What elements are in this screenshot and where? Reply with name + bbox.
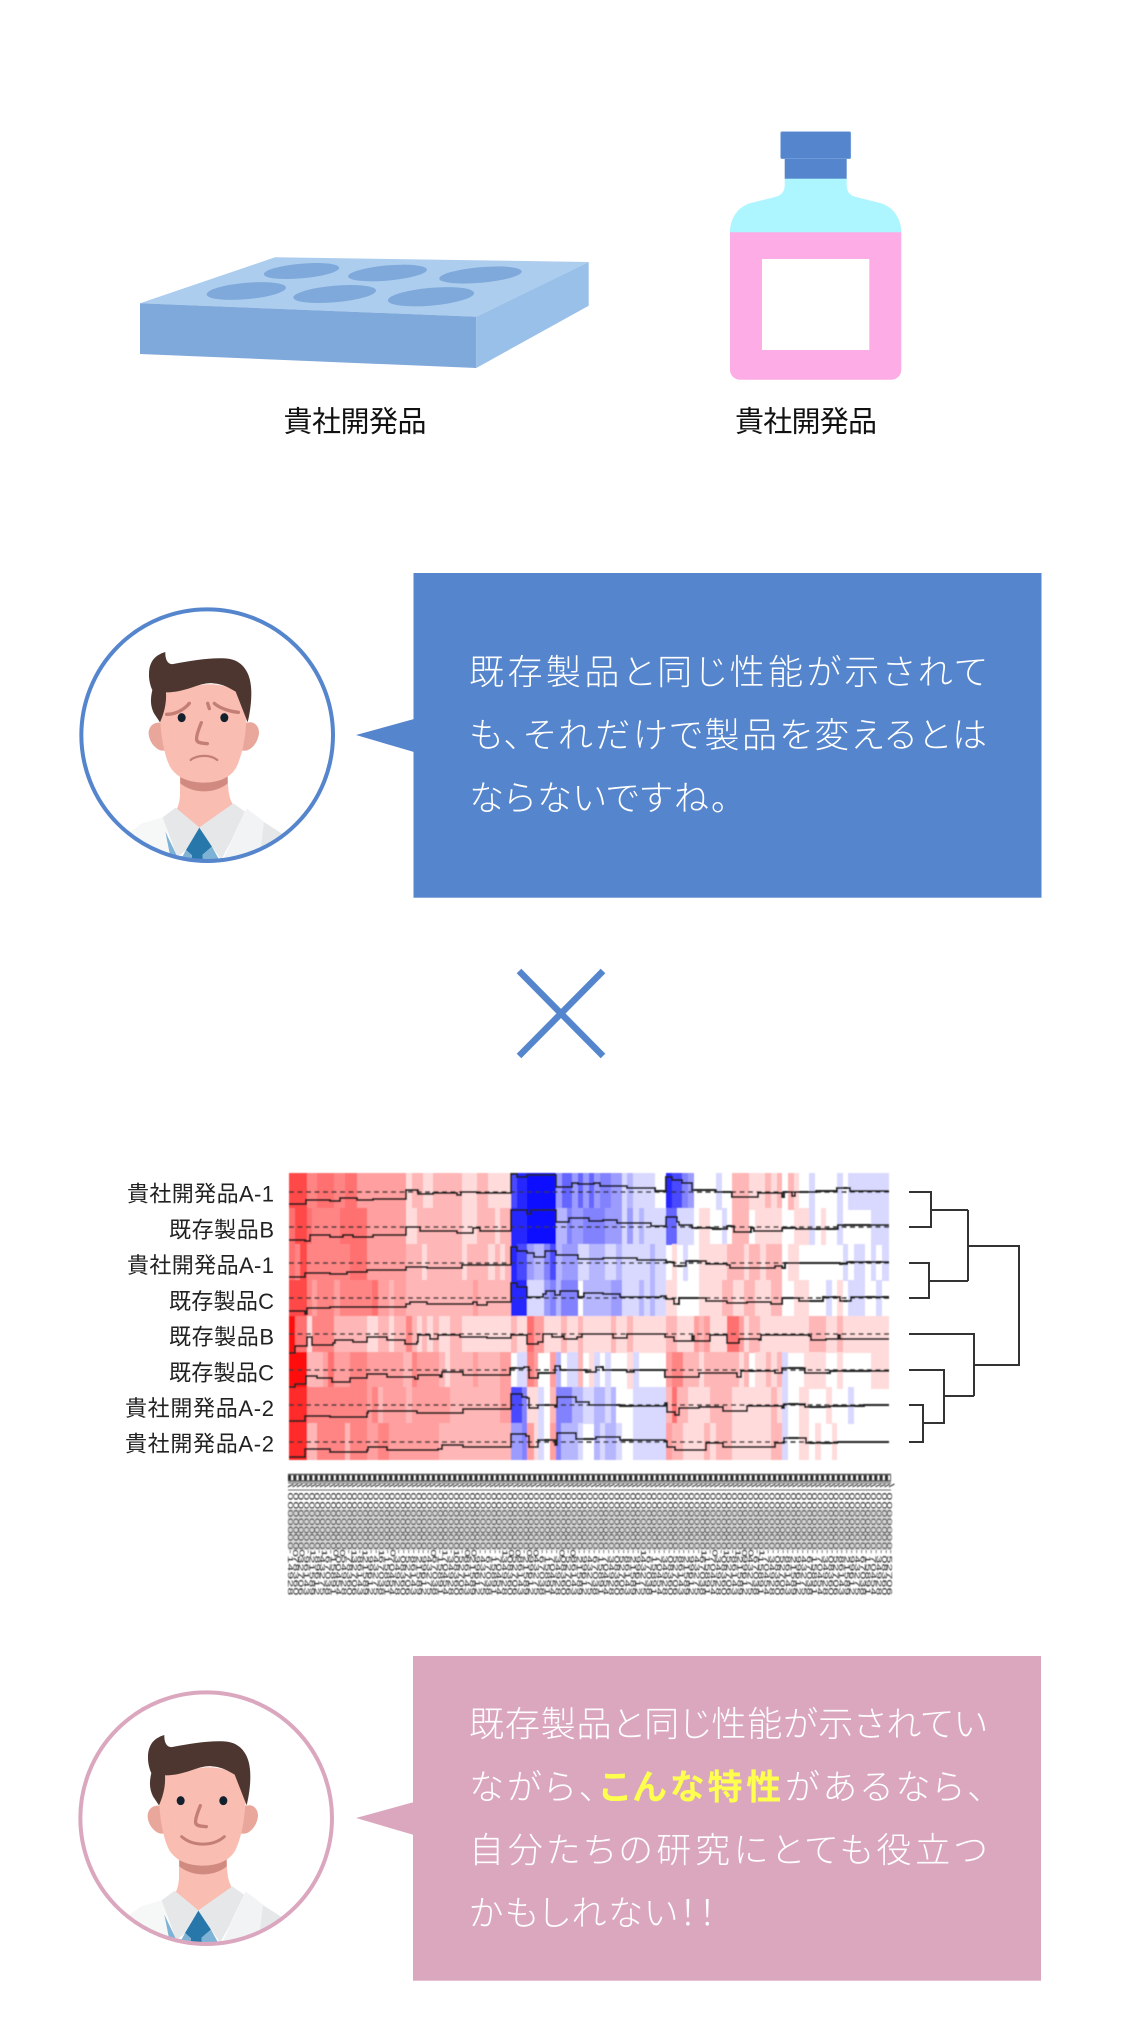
heatmap column labels: 17392846105738294617305829461730582946173058294617305829461730582946173058294617305829461730582946173058294617305 [286, 1556, 893, 1563]
heatmap column labels: 80639258148063925814806392581480639258148063925814806392581480639258148063925814806392581480639258148063925814806 [286, 1588, 893, 1595]
callout: pink speech bubble: 既存製品と同じ性能が示されてい [469, 1706, 987, 1744]
callout: pink speech bubble: かもしれない！！ [469, 1894, 716, 1934]
heatmap column labels: \\\\\\\\\\\\\\\\\\\\\\\\\\\\\\\\\\\\\\\\\\\\\\\\\\\\\\\\\\\\\\\\\\\\\\\\\\\\\\\\\\\\\\\\\\\\\\\\\\\\\\\\\\\\\\\\\\\\\\\\\\\\\\\\\\\\ [286, 1484, 895, 1489]
label: plate product name: 貴社開発品 [284, 406, 426, 438]
heatmap column labels: 26048173952604817395260481739526048173952604817395260481739526048173952604817395260481739526048173952604817395260 [286, 1580, 893, 1587]
icon: well plate [140, 257, 589, 368]
heatmap column labels: 00000000000000000000000000000000000000000000000000000000000000000000000000000000000000000000000000000000000000000 [286, 1510, 893, 1517]
solid histogram traces [289, 1174, 889, 1457]
avatar: happy researcher [80, 1692, 332, 1950]
label: bottle product name: 貴社開発品 [735, 406, 877, 438]
dashed baseline traces [289, 1192, 889, 1442]
heatmap column labels: 00000000000000000000000000000000000000000000000000000000000000000000000000000000000000000000000000000000000000000 [286, 1542, 893, 1550]
heatmap column labels: 00000000000000000000000000000000000000000000000000000000000000000000000000000000000000000000000000000000000000000 [286, 1518, 893, 1526]
heatmap row labels: 貴社開発品A-1 [127, 1182, 274, 1206]
icon: bottle [730, 132, 901, 380]
callout: pink speech bubble: ながら、こんな特性があるなら、 [469, 1768, 985, 1808]
heatmap chart [289, 1173, 889, 1460]
callout: blue speech bubble: ならないですね。 [469, 780, 728, 818]
callout: blue speech bubble: 既存製品と同じ性能が示されて [469, 654, 987, 692]
heatmap row labels: 既存製品B [169, 1324, 274, 1350]
heatmap row labels: 既存製品C [169, 1360, 274, 1386]
heatmap column labels [286, 1474, 895, 1595]
heatmap row labels: 既存製品C [169, 1289, 274, 1314]
callout: blue speech bubble: も、それだけで製品を変えるとは [469, 716, 987, 756]
callout: pink speech bubble: 自分たちの研究にとても役立つ [469, 1832, 987, 1870]
heatmap column labels: 00000000000000000000000000000000000000000000000000000000000000000000000000000000000000000000000000000000000000000 [286, 1526, 893, 1534]
heatmap row labels: 貴社開発品A-2 [125, 1396, 274, 1421]
avatar: worried researcher [81, 609, 333, 867]
icon: cross multiply mark [519, 971, 603, 1056]
heatmap row labels: 貴社開発品A-2 [125, 1432, 274, 1456]
heatmap column labels: 93715620849371562084937156208493715620849371562084937156208493715620849371562084937156208493715620849371562084937 [286, 1572, 893, 1579]
heatmap column labels: 48261937504826193750482619375048261937504826193750482619375048261937504826193750482619375048261937504826193750482 [286, 1564, 893, 1571]
heatmap column labels: 00000000000000000000000000000000000000000000000000000000000000000000000000000000000000000000000000000000000000000 [286, 1534, 893, 1541]
heatmap column labels: 00000000000000000000000000000000000000000000000000000000000000000000000000000000000000000000000000000000000000000 [286, 1502, 893, 1509]
heatmap row labels [125, 1182, 274, 1456]
heatmap row labels: 既存製品B [169, 1218, 274, 1242]
callout: blue speech bubble [356, 573, 1042, 898]
callout: pink speech bubble [356, 1656, 1041, 1981]
heatmap row labels: 貴社開発品A-1 [127, 1253, 274, 1278]
dendrogram [909, 1192, 1019, 1442]
heatmap column labels: -00-1-1-00-1-1--1-0-------0-1-1-00-----100-00----0-0-------------1-----------1-0-1-100-1-------------------------- [286, 1549, 894, 1557]
heatmap column labels: 00000000000000000000000000000000000000000000000000000000000000000000000000000000000000000000000000000000000000000 [286, 1492, 893, 1500]
